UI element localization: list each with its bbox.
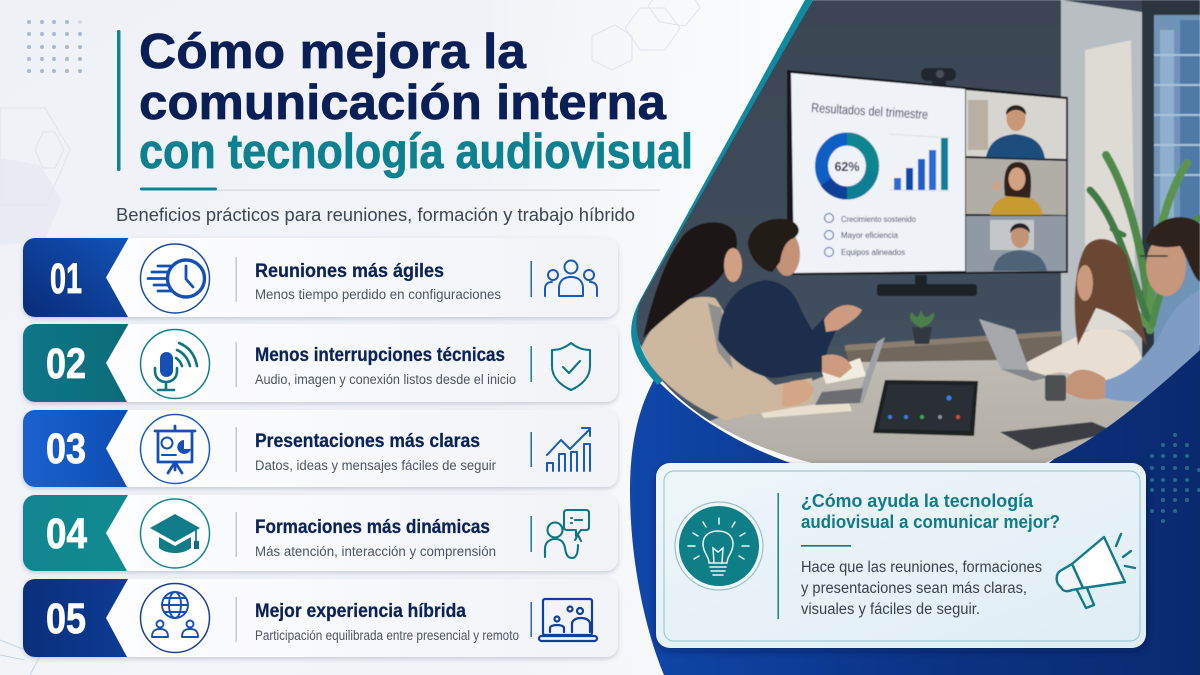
icon: presentation board <box>140 414 210 484</box>
description: Más atención, interacción y comprensión <box>255 544 496 559</box>
title accent bar <box>117 30 120 171</box>
video tile 3 <box>966 216 1066 272</box>
number badge <box>23 410 128 487</box>
number: 01 <box>50 255 82 303</box>
table <box>710 360 1140 463</box>
video tile 1 <box>966 90 1066 159</box>
window with city view <box>1142 0 1200 360</box>
number: 03 <box>46 425 86 473</box>
wall screen <box>787 68 1068 275</box>
woman left <box>640 222 814 420</box>
dark folder <box>1000 422 1116 450</box>
dotted accent on blue shape <box>1150 433 1200 523</box>
icon: shield <box>552 343 590 390</box>
teal diagonal accent stroke <box>635 0 810 383</box>
webcam <box>921 68 956 85</box>
icon: globe network <box>140 584 210 652</box>
panel card <box>656 463 1146 648</box>
donut chart <box>822 139 873 193</box>
description: Datos, ideas y mensajes fáciles de seguir <box>255 458 496 473</box>
card <box>23 579 618 657</box>
callout heading: audiovisual a comunicar mejor? <box>801 511 1060 532</box>
right divider <box>530 602 532 637</box>
row 2 <box>23 324 618 402</box>
card <box>23 238 618 317</box>
callout panel <box>656 463 1146 648</box>
icon: person with speech bubble <box>545 510 589 558</box>
laptop left <box>815 337 885 405</box>
title line 2: comunicación interna <box>139 76 667 130</box>
row 5 <box>23 579 618 657</box>
card <box>23 324 618 402</box>
description: Audio, imagen y conexión listos desde el inicio <box>255 372 516 387</box>
callout body <box>801 559 1042 618</box>
callout body: Hace que las reuniones, formaciones <box>801 559 1042 576</box>
slide list: Crecimiento sostenido <box>841 215 917 224</box>
card <box>23 410 618 487</box>
slide list <box>824 214 917 257</box>
number: 02 <box>46 340 86 388</box>
row 4 <box>23 495 618 571</box>
right divider <box>530 261 532 297</box>
right divider <box>530 516 532 552</box>
subtitle: Beneficios prácticos para reuniones, formación y trabajo híbrido <box>116 205 635 225</box>
divider <box>778 493 779 619</box>
number: 05 <box>46 595 86 643</box>
mug <box>1045 375 1066 401</box>
tablet <box>873 380 978 436</box>
slide title: Resultados del trimestre <box>811 100 929 122</box>
slide list: Mayor eficiencia <box>841 231 899 240</box>
divider <box>236 512 237 557</box>
title line 3: con tecnología audiovisual <box>139 125 693 179</box>
icon: lightbulb <box>675 502 763 590</box>
bar chart <box>889 134 950 191</box>
icon: growth chart <box>547 428 590 471</box>
credenza <box>846 336 1062 362</box>
photo: meeting room with video conference screen <box>620 0 1200 480</box>
icon: megaphone <box>1057 534 1135 608</box>
divider <box>236 257 237 302</box>
callout body: visuales y fáciles de seguir. <box>801 601 980 618</box>
back wall <box>636 0 1143 422</box>
laptop right <box>979 319 1050 381</box>
right divider <box>530 432 532 467</box>
divider <box>236 597 237 642</box>
number: 04 <box>46 510 87 558</box>
side wall <box>1060 0 1143 381</box>
woman right <box>1022 239 1147 380</box>
heading: Menos interrupciones técnicas <box>255 345 505 366</box>
decorative hexagons and dots, top left <box>0 0 700 245</box>
heading underline <box>801 545 851 547</box>
heading: Formaciones más dinámicas <box>255 517 490 538</box>
small potted plant <box>910 310 934 344</box>
title underline <box>140 188 660 191</box>
number badge <box>23 579 128 657</box>
man with navy shirt <box>718 219 862 378</box>
row 1 <box>23 238 618 317</box>
number badge <box>23 495 128 571</box>
number badge <box>23 238 128 317</box>
decorative lines, bottom left <box>0 640 40 675</box>
icon: laptop with participants <box>539 599 597 641</box>
soft white fade toward the photo <box>480 0 820 675</box>
callout body: y presentaciones sean más claras, <box>801 580 1027 597</box>
icon: clock <box>140 244 210 313</box>
man right with blue shirt <box>1066 217 1200 401</box>
card <box>23 495 618 571</box>
icon: graduation cap <box>140 499 210 568</box>
callout heading <box>801 490 1060 532</box>
inner border <box>664 471 1140 641</box>
title block <box>117 25 693 179</box>
donut value: 62% <box>834 160 860 174</box>
slide list: Equipos alineados <box>841 248 905 257</box>
divider <box>236 427 237 472</box>
soundbar <box>877 275 977 296</box>
heading: Reuniones más ágiles <box>255 261 444 282</box>
title line 1: Cómo mejora la <box>139 25 527 79</box>
plant <box>1088 155 1198 330</box>
row 3 <box>23 410 618 487</box>
heading: Presentaciones más claras <box>255 431 480 452</box>
description: Participación equilibrada entre presencial y remoto <box>255 628 519 643</box>
video tile 2 <box>966 158 1066 215</box>
blue curved background shape <box>630 345 1200 675</box>
icon: team <box>545 260 597 296</box>
right divider <box>530 346 532 382</box>
description: Menos tiempo perdido en configuraciones <box>255 287 501 302</box>
number badge <box>23 324 128 402</box>
notebooks <box>760 358 866 418</box>
heading: Mejor experiencia híbrida <box>255 601 466 622</box>
divider <box>236 342 237 387</box>
icon: microphone <box>140 330 210 398</box>
callout heading: ¿Cómo ayuda la tecnología <box>801 490 1034 511</box>
